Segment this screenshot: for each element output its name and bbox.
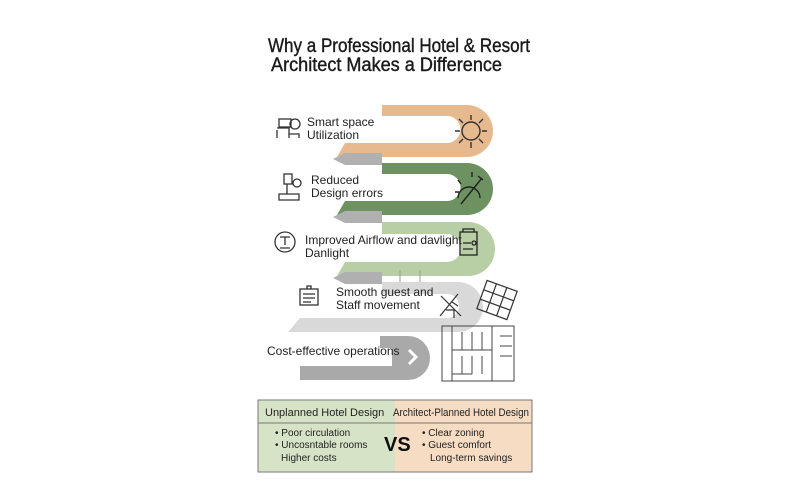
icon: space <box>277 119 300 138</box>
ribbon: band 5 cost <box>267 336 430 380</box>
title <box>268 36 531 76</box>
left list <box>275 428 367 464</box>
icon: clipboard <box>460 229 477 255</box>
text: smart space: Smart space <box>307 115 375 129</box>
right list: • Guest comfort <box>422 440 491 451</box>
text: airflow: Improved Airflow and davlight <box>305 233 462 247</box>
header right: Architect-Planned Hotel Design <box>393 407 529 419</box>
ribbon: band 2 design errors <box>279 163 493 223</box>
left list: • Uncosntable rooms <box>275 440 367 451</box>
ribbon: band 4 movement: Staff movement <box>336 298 420 312</box>
icon: design <box>279 174 301 200</box>
text: reduced errors: Reduced <box>311 173 359 187</box>
left list: Higher costs <box>281 453 337 464</box>
icon: pencil <box>455 172 483 204</box>
ribbon: band 3 airflow: Danlight <box>305 246 350 260</box>
icon: service <box>300 286 318 305</box>
right list <box>422 428 512 464</box>
icon: sun <box>455 115 487 148</box>
left list: • Poor circulation <box>275 428 350 439</box>
icon: airflow <box>275 232 295 252</box>
icon: furniture <box>440 294 461 318</box>
ribbon: band 1 smart space: Utilization <box>307 128 359 142</box>
ribbon: band 4 movement <box>288 280 517 332</box>
title: Architect Makes a Difference <box>271 55 502 76</box>
ribbon: band 1 smart space <box>277 105 493 165</box>
header left: Unplanned Hotel Design <box>265 407 384 419</box>
ribbon: band 2 design errors: Design errors <box>311 186 383 200</box>
icon: tilted grid <box>477 280 517 320</box>
icon: chevron <box>409 350 416 364</box>
title: Why a Professional Hotel & Resort <box>268 36 531 57</box>
text: cost: Cost-effective operations <box>267 344 400 358</box>
vs: VS <box>384 434 411 456</box>
comparison table <box>258 400 532 472</box>
text: movement: Smooth guest and <box>336 285 433 299</box>
right list: Long-term savings <box>430 453 512 464</box>
ribbon: band 3 airflow <box>275 222 495 284</box>
right list: • Clear zoning <box>422 428 484 439</box>
floor plan <box>400 270 514 381</box>
